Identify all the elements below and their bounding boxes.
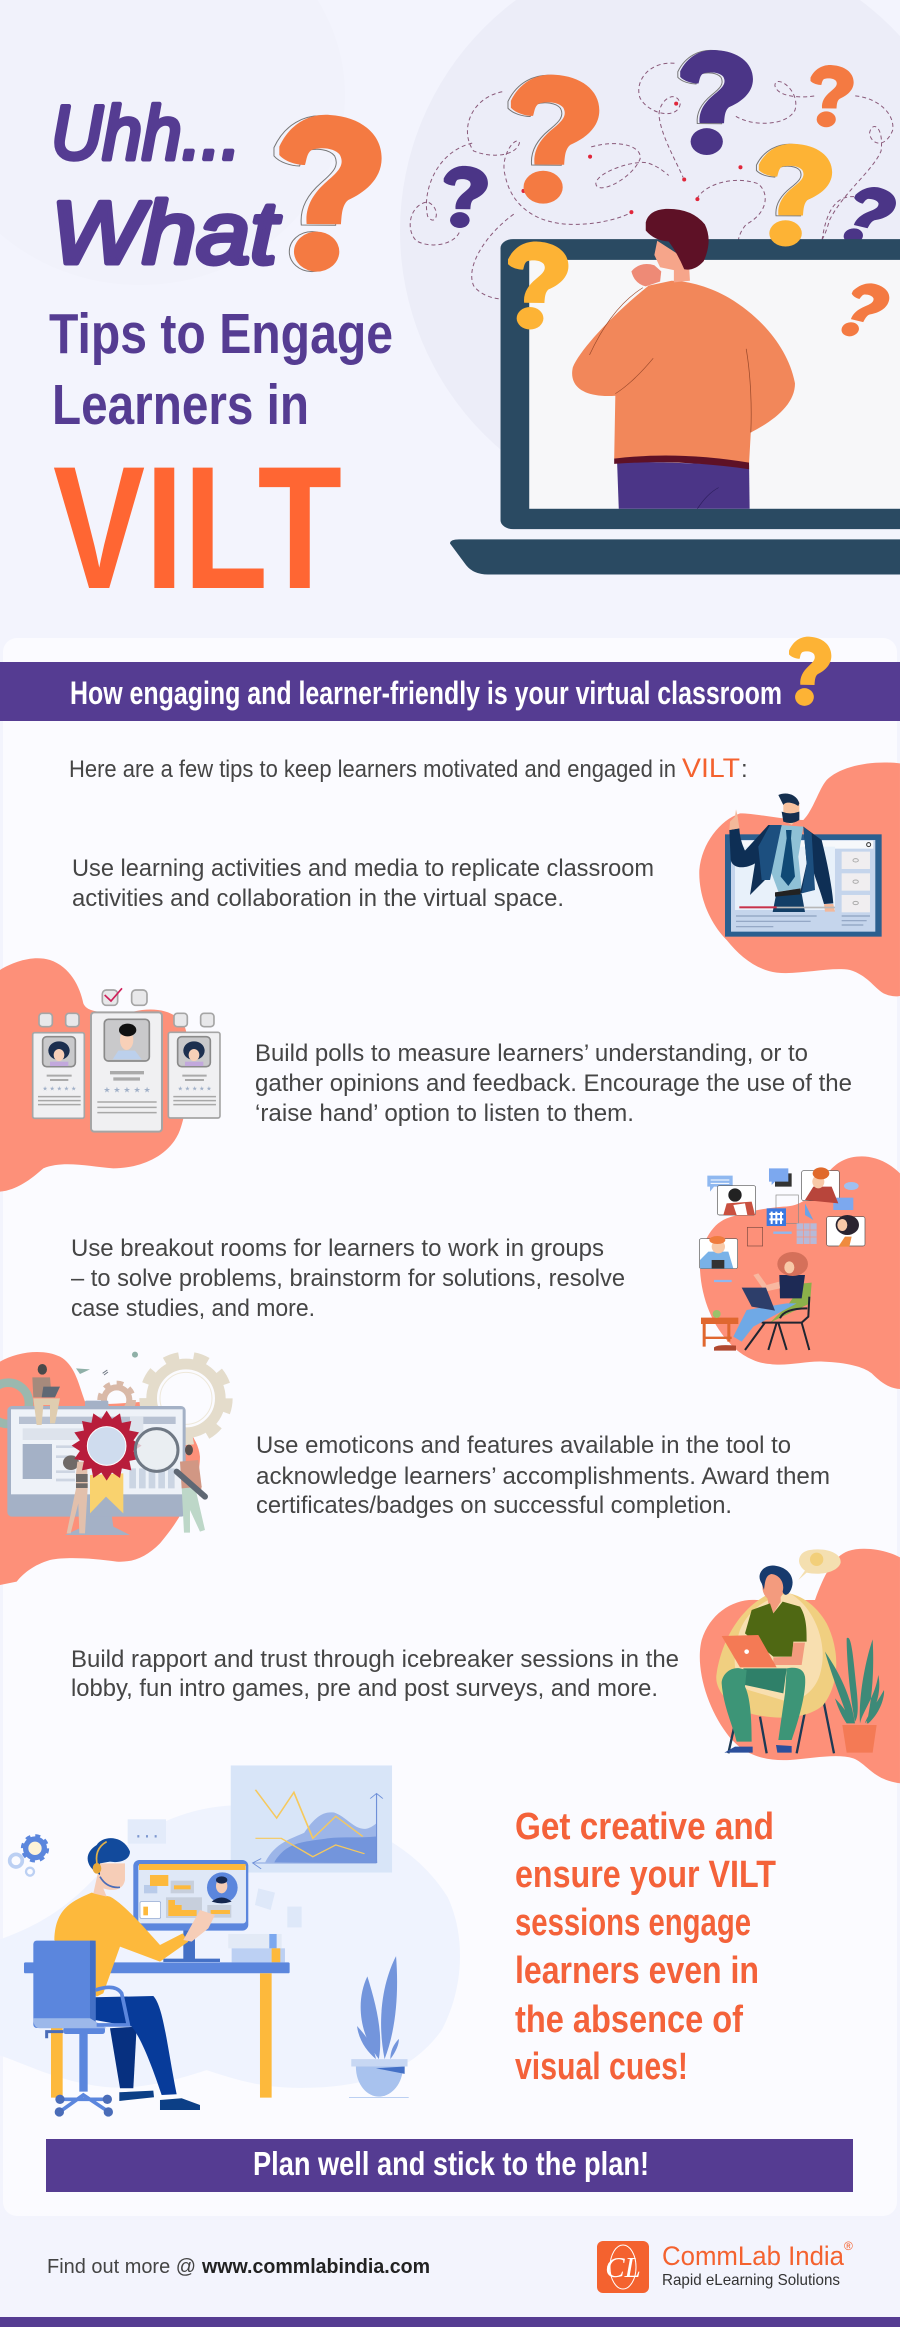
closing callout text: ensure your VILT xyxy=(515,1854,776,1896)
intro text: : xyxy=(741,756,748,783)
content card xyxy=(3,638,897,2216)
tip 2 illustration: poll cards: ★★★★★ xyxy=(178,1086,212,1093)
footer link xyxy=(47,2256,430,2278)
tip 4 text: acknowledge learners’ accomplishments. Award them xyxy=(256,1463,830,1490)
hero illustration: puzzled man at laptop with question marks xyxy=(410,50,900,574)
tip 5 text: Build rapport and trust through icebreaker sessions in the xyxy=(71,1646,679,1673)
header band xyxy=(0,662,900,721)
hero background shapes xyxy=(0,0,900,519)
question mark: yellow centre right xyxy=(756,144,832,246)
closing callout text: the absence of xyxy=(515,1999,743,2041)
closing callout text: sessions engage xyxy=(515,1902,751,1944)
title: VILT: VILT xyxy=(53,431,342,626)
tip 3 text: Use breakout rooms for learners to work in groups xyxy=(71,1235,604,1262)
tip 2 illustration: poll cards: ★★★★★ xyxy=(103,1086,151,1095)
tip 3 text xyxy=(71,1235,625,1322)
question mark: purple clipped right xyxy=(835,183,900,249)
footer link: Find out more @ xyxy=(47,2256,196,2278)
closing callout text xyxy=(515,1806,776,2088)
tip 5 illustration: learner with laptop on bean bag and plant xyxy=(700,1549,900,1783)
icon: big orange question mark xyxy=(274,115,382,272)
closing callout text: visual cues! xyxy=(515,2046,688,2088)
CommLab India logo xyxy=(597,2239,853,2293)
intro text: VILT xyxy=(682,753,740,783)
bottom band xyxy=(0,2317,900,2327)
tip 2 illustration: poll cards: ★★★★★ xyxy=(42,1086,76,1093)
icon: yellow question mark in band xyxy=(789,637,831,706)
question mark: orange large xyxy=(508,75,599,204)
question mark: purple left xyxy=(444,166,488,228)
tip 2 text: gather opinions and feedback. Encourage the use of the xyxy=(255,1070,852,1097)
CommLab India logo: CommLab India xyxy=(662,2241,845,2271)
title: What: What xyxy=(51,183,281,282)
subtitle: Tips to Engage: Tips to Engage xyxy=(49,302,393,366)
plan banner: Plan well and stick to the plan! xyxy=(253,2145,649,2182)
tip 4 text: certificates/badges on successful completion. xyxy=(256,1492,732,1519)
subtitle: Learners in: Learners in xyxy=(52,373,309,437)
question mark: yellow on laptop xyxy=(508,242,568,329)
man xyxy=(572,209,795,509)
tip 3 illustration: breakout room participants xyxy=(699,1156,900,1389)
title: Uhh...: Uhh... xyxy=(51,91,241,176)
tip 2 text: ‘raise hand’ option to listen to them. xyxy=(255,1100,634,1127)
tip 2 illustration: poll cards xyxy=(0,958,220,1192)
tip 4 text xyxy=(256,1432,830,1519)
closing callout text: Get creative and xyxy=(515,1806,774,1848)
woman on chair xyxy=(701,1252,812,1351)
footer link: www.commlabindia.com xyxy=(201,2256,430,2278)
tip 3 text: case studies, and more. xyxy=(71,1295,315,1322)
plan banner xyxy=(46,2139,853,2192)
closing callout text: learners even in xyxy=(515,1950,759,1992)
backdrop, chart and plant xyxy=(0,1765,460,2097)
tip 4 illustration: monitor with award badge xyxy=(0,1352,229,1585)
dashed thought trails xyxy=(410,63,893,299)
CommLab India logo: ® xyxy=(844,2239,853,2253)
laptop base xyxy=(450,539,900,574)
tip 1 text: Use learning activities and media to replicate classroom xyxy=(72,855,654,882)
tip 2 text: Build polls to measure learners’ understanding, or to xyxy=(255,1040,808,1067)
question mark: orange lower right xyxy=(834,280,895,341)
tip 5 text: lobby, fun intro games, pre and post surveys, and more. xyxy=(71,1675,658,1702)
tip 1 text: activities and collaboration in the virtual space. xyxy=(72,885,564,912)
tip 1 text xyxy=(72,855,654,912)
question mark: orange small top right xyxy=(810,65,854,127)
tip 4 text: Use emoticons and features available in the tool to xyxy=(256,1432,791,1459)
closing illustration: support agent at desk xyxy=(0,1765,460,2117)
laptop screen xyxy=(501,239,900,529)
CommLab India logo: CL xyxy=(605,2252,641,2284)
question mark: purple top xyxy=(678,50,753,155)
tip 5 text xyxy=(71,1646,679,1702)
intro text: Here are a few tips to keep learners motivated and engaged in xyxy=(69,756,676,783)
tip 3 text: – to solve problems, brainstorm for solutions, resolve xyxy=(71,1265,625,1292)
CommLab India logo: Rapid eLearning Solutions xyxy=(662,2272,840,2289)
tip 2 text xyxy=(255,1040,852,1127)
agent, monitor and desk xyxy=(10,1819,302,2117)
tip 1 illustration: presenter on screen xyxy=(699,762,900,996)
